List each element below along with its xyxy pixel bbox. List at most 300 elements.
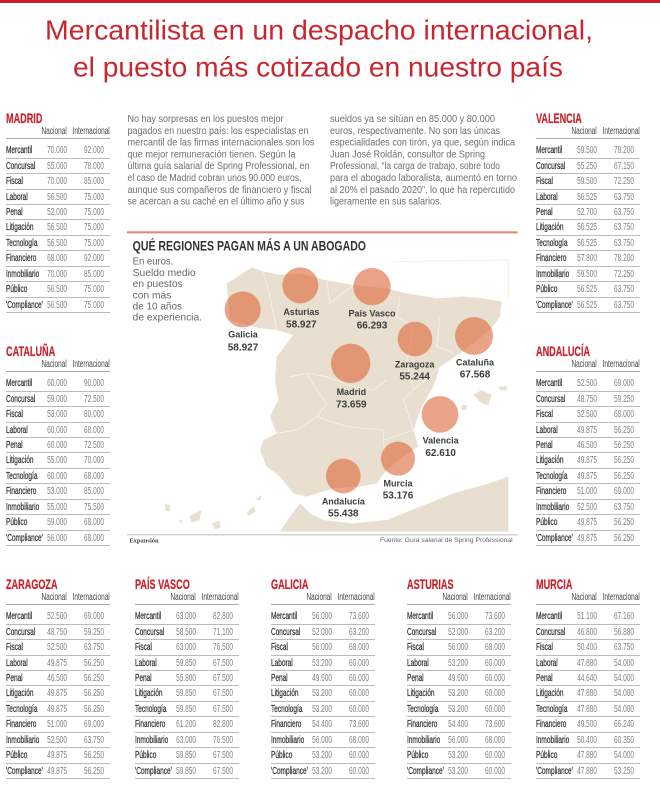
panel bottom rule (127, 534, 518, 535)
region labels: Murcia (383, 478, 413, 488)
table rows: 54.400 (312, 719, 332, 730)
intro text: Juan José Roldán, consultor de Spring (330, 149, 485, 160)
column headers: Nacional (41, 592, 67, 603)
table rows: 56.250 (614, 533, 634, 544)
table rows: 46.500 (577, 440, 597, 451)
table rows: Inmobiliario (135, 735, 168, 746)
table rows: Penal (407, 673, 424, 684)
table rows: 56.250 (84, 673, 104, 684)
table rows: Financiero (271, 719, 301, 730)
table rows: Mercantil (6, 611, 32, 622)
region labels: 55.244 (399, 372, 430, 383)
table rows: 56.500 (47, 284, 67, 295)
table rows: 56.525 (577, 192, 597, 203)
table rows: 63.200 (485, 627, 505, 638)
column headers (135, 593, 239, 604)
region labels: Valencia (423, 436, 460, 446)
table rows: Laboral (271, 658, 293, 669)
table rows: Litigación (536, 222, 563, 233)
source note: Fuente: Guía salarial de Spring Professional (380, 537, 513, 544)
table rows: Fiscal (271, 642, 288, 653)
table rows: Fiscal (6, 409, 23, 420)
table rows: 70.000 (47, 145, 67, 156)
table rows: 54.000 (614, 658, 634, 669)
table rows: 53.200 (448, 750, 468, 761)
table rows: Litigación (536, 688, 563, 699)
table rows: 56.500 (47, 238, 67, 249)
table rows: 63.750 (614, 642, 634, 653)
table rows (271, 611, 375, 779)
intro text: última guía salarial de Spring Professional, en (128, 161, 310, 172)
table rows: Tecnología (135, 704, 166, 715)
table rows: 63.750 (614, 284, 634, 295)
table rows: 56.500 (47, 192, 67, 203)
table rows: 'Compliance' (6, 533, 43, 544)
table rows: 47.880 (577, 704, 597, 715)
table rows: 67.500 (213, 658, 233, 669)
table rows: 49.875 (577, 533, 597, 544)
table rows: 73.600 (349, 611, 369, 622)
map note: en puestos (133, 279, 183, 290)
table rows: 60.000 (485, 750, 505, 761)
table rows: 55.000 (47, 502, 67, 513)
table rows: Público (6, 750, 27, 761)
table rows: Público (536, 284, 557, 295)
map note: Sueldo medio (133, 268, 196, 279)
table rows: Mercantil (407, 611, 433, 622)
table rows: 60.350 (614, 735, 634, 746)
region labels: 66.293 (357, 320, 388, 331)
intro text: especialidades con tirón, ya que, según indica (330, 138, 515, 149)
table rows: 73.600 (485, 611, 505, 622)
table rows: 69.000 (84, 719, 104, 730)
table rows: Fiscal (6, 642, 23, 653)
table rows: 52.500 (577, 502, 597, 513)
table rows: 60.000 (47, 378, 67, 389)
intro text: se acercan a su caché en el último año y sus (128, 197, 305, 208)
table rows: Litigación (271, 688, 298, 699)
table rows: Público (6, 517, 27, 528)
table rows: Público (271, 750, 292, 761)
table rows: 56.000 (312, 611, 332, 622)
table title: PAÍS VASCO (135, 576, 190, 592)
intro text: pagados en nuestro país: los especialistas en (128, 126, 308, 137)
table rows: 56.000 (448, 642, 468, 653)
table rows: 53.200 (448, 766, 468, 777)
table rows: 63.750 (614, 207, 634, 218)
table rows: 75.000 (84, 284, 104, 295)
table rows: 59.850 (176, 688, 196, 699)
column headers: Internacional (73, 592, 110, 603)
table rows: 67.160 (614, 611, 634, 622)
table rows: Inmobiliario (407, 735, 440, 746)
table rows: Fiscal (536, 642, 553, 653)
table rows: 63.750 (614, 238, 634, 249)
region labels (228, 307, 495, 520)
table rows: Litigación (536, 455, 563, 466)
table rows: 56.250 (84, 750, 104, 761)
map note (133, 256, 202, 324)
table rows: 60.000 (485, 658, 505, 669)
table rows: 72.250 (614, 176, 634, 187)
table rows: Mercantil (271, 611, 297, 622)
table rows: 70.000 (84, 455, 104, 466)
table rows: 53.250 (614, 766, 634, 777)
map of Spain (165, 260, 508, 532)
table rows: 52.000 (448, 627, 468, 638)
table rows: 75.500 (84, 502, 104, 513)
table rows: Tecnología (536, 471, 567, 482)
table rows: 60.000 (349, 658, 369, 669)
table rows: 60.000 (47, 425, 67, 436)
region labels: 67.568 (460, 370, 491, 381)
table title: GALICIA (271, 576, 308, 592)
table rows: 78.200 (614, 253, 634, 264)
table rows: Concursal (536, 161, 565, 172)
table rows: 56.880 (614, 627, 634, 638)
table rows: Concursal (271, 627, 300, 638)
table rows: 69.000 (614, 486, 634, 497)
table rows: 54.400 (448, 719, 468, 730)
table title: CATALUÑA (6, 343, 55, 359)
table rows: Tecnología (407, 704, 438, 715)
table rows: 56.250 (614, 425, 634, 436)
table rows (135, 611, 239, 779)
table rows: Laboral (135, 658, 157, 669)
table: Cataluña (6, 343, 110, 546)
table rows (536, 145, 640, 313)
table rows: Inmobiliario (536, 735, 569, 746)
table rows: 52.500 (47, 642, 67, 653)
region labels: 62.610 (425, 448, 456, 459)
table rows: 49.600 (312, 673, 332, 684)
intro text: ligeramente en sus salarios. (330, 197, 442, 208)
table rows: 'Compliance' (6, 300, 43, 311)
column headers: Internacional (603, 592, 640, 603)
table rows: Financiero (6, 253, 36, 264)
table rows: Laboral (6, 658, 28, 669)
region labels: Madrid (337, 387, 366, 397)
table rows: 60.000 (349, 673, 369, 684)
table rows: Mercantil (536, 378, 562, 389)
table rows: Penal (536, 207, 553, 218)
table rows: 56.000 (312, 642, 332, 653)
table rows: 'Compliance' (135, 766, 172, 777)
table rows: 54.000 (614, 673, 634, 684)
table rows: 63.750 (614, 300, 634, 311)
table rows: Inmobiliario (271, 735, 304, 746)
table rows: Penal (536, 440, 553, 451)
table rows: 92.000 (84, 145, 104, 156)
table rows: 56.000 (448, 735, 468, 746)
map note: de 10 años (133, 301, 182, 312)
table rows: 59.000 (47, 517, 67, 528)
table rows: 72.250 (614, 269, 634, 280)
table rows: 90.000 (84, 378, 104, 389)
table rows: 52.500 (577, 409, 597, 420)
column headers: Nacional (41, 126, 67, 137)
table rows: Concursal (6, 627, 35, 638)
column headers (407, 593, 511, 604)
table rows: 49.875 (47, 704, 67, 715)
column headers: Nacional (571, 359, 597, 370)
table rows: 56.525 (577, 300, 597, 311)
table rows: 'Compliance' (536, 533, 573, 544)
column headers (6, 127, 110, 138)
table rows: Litigación (6, 688, 33, 699)
table rows: 47.880 (577, 766, 597, 777)
panel: map of regional salaries (127, 231, 518, 545)
table rows: 55.800 (176, 673, 196, 684)
intro text: sueldos ya se sitúan en 85.000 y 80.000 (330, 114, 496, 125)
column headers: Internacional (73, 126, 110, 137)
table rows: Laboral (407, 658, 429, 669)
intro text: aunque sus compañeros de financiero y fiscal (128, 185, 312, 196)
table rows: 51.000 (577, 486, 597, 497)
region labels: 55.438 (328, 509, 359, 520)
table rows: 68.000 (84, 533, 104, 544)
table rows: 60.000 (47, 440, 67, 451)
table rows: 54.000 (614, 704, 634, 715)
table rows: 68.000 (349, 642, 369, 653)
table rows: 68.000 (614, 409, 634, 420)
table rows: 69.000 (84, 611, 104, 622)
intro text: el caso de Madrid cobran unos 90.000 euros, (128, 173, 302, 184)
table rows: 70.000 (47, 176, 67, 187)
table rows: Inmobiliario (536, 502, 569, 513)
table rows: 85.000 (84, 176, 104, 187)
intro text: para el abogado laboralista, aumentó en torno (330, 173, 518, 184)
table rows: Público (6, 284, 27, 295)
table rows: Laboral (6, 425, 28, 436)
table rows: Concursal (407, 627, 436, 638)
table: Zaragoza (6, 576, 110, 779)
map note: con más (133, 290, 172, 301)
table rows: 48.750 (47, 627, 67, 638)
table rows: 92.000 (84, 253, 104, 264)
table rows: 56.250 (84, 704, 104, 715)
table rows: Penal (271, 673, 288, 684)
table rows (6, 611, 110, 779)
table rows: Penal (135, 673, 152, 684)
table rows: 68.000 (84, 517, 104, 528)
table rows: 73.600 (349, 719, 369, 730)
top red bar (0, 0, 660, 3)
table rows: 67.150 (614, 161, 634, 172)
intro text: euros, respectivamente. No son las únicas (330, 126, 500, 137)
table title: ANDALUCÍA (536, 343, 590, 359)
table rows: Concursal (536, 627, 565, 638)
table rows: 63.000 (176, 735, 196, 746)
table rows: 82.800 (213, 611, 233, 622)
table rows: Mercantil (536, 611, 562, 622)
table rows: 80.000 (84, 409, 104, 420)
table rows: Litigación (6, 455, 33, 466)
table rows: 52.700 (577, 207, 597, 218)
table rows: 75.000 (84, 222, 104, 233)
table rows: 52.500 (47, 611, 67, 622)
table rows: Laboral (536, 658, 558, 669)
table rows (6, 378, 110, 546)
table rows: 52.500 (577, 378, 597, 389)
table rows: 75.000 (84, 192, 104, 203)
table rows: Concursal (536, 394, 565, 405)
region labels: Asturias (283, 307, 319, 317)
table rows: 78.200 (614, 145, 634, 156)
table rows: 60.000 (349, 766, 369, 777)
table rows: 52.500 (47, 735, 67, 746)
table: Madrid (6, 110, 110, 313)
table rows (536, 378, 640, 546)
table rows: 63.750 (84, 735, 104, 746)
table rows: 49.875 (577, 471, 597, 482)
table rows: 53.200 (448, 688, 468, 699)
table rows: 56.500 (47, 300, 67, 311)
table rows: Inmobiliario (536, 269, 569, 280)
table title: MURCIA (536, 576, 572, 592)
column headers (271, 593, 375, 604)
table: Andalucía (536, 343, 640, 546)
table rows: 56.500 (47, 222, 67, 233)
table rows: 72.500 (84, 394, 104, 405)
table rows: 56.250 (84, 658, 104, 669)
table rows: 60.000 (349, 688, 369, 699)
region labels: Zaragoza (395, 360, 435, 370)
table rows: 55.250 (577, 161, 597, 172)
table rows: 59.500 (577, 176, 597, 187)
table title: ZARAGOZA (6, 576, 58, 592)
table rows: 56.525 (577, 284, 597, 295)
table rows: 68.000 (485, 735, 505, 746)
title: Mercantilista en un despacho internacional, (45, 14, 593, 46)
table rows: 50.400 (577, 642, 597, 653)
table rows: Litigación (6, 222, 33, 233)
table rows: 49.600 (448, 673, 468, 684)
table rows: 47.880 (577, 658, 597, 669)
column headers: Nacional (306, 592, 332, 603)
table rows: 46.500 (47, 673, 67, 684)
salary bubbles (225, 267, 493, 493)
table rows: 68.000 (84, 425, 104, 436)
table rows: Financiero (6, 486, 36, 497)
table rows: 63.000 (176, 642, 196, 653)
table rows: 68.000 (47, 253, 67, 264)
table rows: 72.500 (84, 440, 104, 451)
table rows: Financiero (536, 719, 566, 730)
table rows: Tecnología (536, 704, 567, 715)
table title: VALENCIA (536, 110, 582, 126)
table rows: 'Compliance' (6, 766, 43, 777)
table rows: Penal (536, 673, 553, 684)
table rows: 67.500 (213, 750, 233, 761)
table rows: 67.500 (213, 688, 233, 699)
table rows: 53.200 (312, 766, 332, 777)
table rows: 73.600 (485, 719, 505, 730)
table rows: Litigación (407, 688, 434, 699)
table rows: 71.100 (213, 627, 233, 638)
column headers: Nacional (41, 359, 67, 370)
table rows: 60.000 (349, 704, 369, 715)
intro text (128, 114, 518, 208)
column headers: Internacional (73, 359, 110, 370)
table rows: 68.000 (349, 735, 369, 746)
table rows: 59.250 (614, 394, 634, 405)
table rows: Fiscal (536, 409, 553, 420)
table rows (536, 611, 640, 779)
table rows: 63.750 (614, 222, 634, 233)
intro text: Professional, “la carga de trabajo, sobre todo (330, 161, 500, 172)
table rows: Fiscal (135, 642, 152, 653)
region labels: Cataluña (456, 358, 495, 368)
table rows: 60.000 (485, 688, 505, 699)
map note: En euros. (133, 256, 173, 267)
table: Valencia (536, 110, 640, 313)
table rows: 'Compliance' (407, 766, 444, 777)
table rows: 53.000 (47, 486, 67, 497)
intro text: No hay sorpresas en los puestos mejor (128, 114, 284, 125)
table rows: Tecnología (271, 704, 302, 715)
column headers (536, 360, 640, 372)
table rows: 57.800 (577, 253, 597, 264)
table rows: Mercantil (6, 145, 32, 156)
table rows (6, 145, 110, 313)
table rows: 68.000 (84, 471, 104, 482)
table rows: 'Compliance' (536, 766, 573, 777)
column headers: Nacional (571, 126, 597, 137)
table rows: 53.000 (47, 409, 67, 420)
table rows: 49.875 (47, 658, 67, 669)
column headers (6, 593, 110, 604)
intro text: que mejor remuneración tienen. Según la (128, 149, 296, 160)
table rows: Tecnología (536, 238, 567, 249)
table rows: 82.800 (213, 719, 233, 730)
table rows: 85.000 (84, 269, 104, 280)
table rows: 56.250 (614, 517, 634, 528)
column headers: Nacional (442, 592, 468, 603)
table rows: Mercantil (6, 378, 32, 389)
table rows: 55.000 (47, 161, 67, 172)
table rows: 70.000 (47, 269, 67, 280)
table: Asturias (407, 576, 511, 779)
table rows: Público (407, 750, 428, 761)
table rows: 59.250 (84, 627, 104, 638)
table rows: 67.500 (213, 673, 233, 684)
title: el puesto más cotizado en nuestro país (73, 52, 563, 82)
table rows: 52.000 (312, 627, 332, 638)
table rows: Fiscal (407, 642, 424, 653)
column headers (536, 127, 640, 138)
table rows: Inmobiliario (6, 502, 39, 513)
table rows: Financiero (407, 719, 437, 730)
table rows: Público (536, 517, 557, 528)
table rows: 44.640 (577, 673, 597, 684)
table rows: 53.200 (312, 688, 332, 699)
table rows: Inmobiliario (6, 269, 39, 280)
publisher credit: Expansión (129, 539, 159, 545)
table: País Vasco (135, 576, 239, 779)
table rows: 63.750 (614, 192, 634, 203)
table rows: 63.200 (349, 627, 369, 638)
column headers: Internacional (603, 359, 640, 370)
column headers: Internacional (474, 592, 511, 603)
table: Galicia (271, 576, 375, 779)
table rows: 53.200 (312, 704, 332, 715)
table rows: Concursal (135, 627, 164, 638)
table rows: 58.500 (176, 627, 196, 638)
table rows: 76.500 (213, 642, 233, 653)
table rows: 53.200 (312, 750, 332, 761)
table rows: 59.850 (176, 658, 196, 669)
